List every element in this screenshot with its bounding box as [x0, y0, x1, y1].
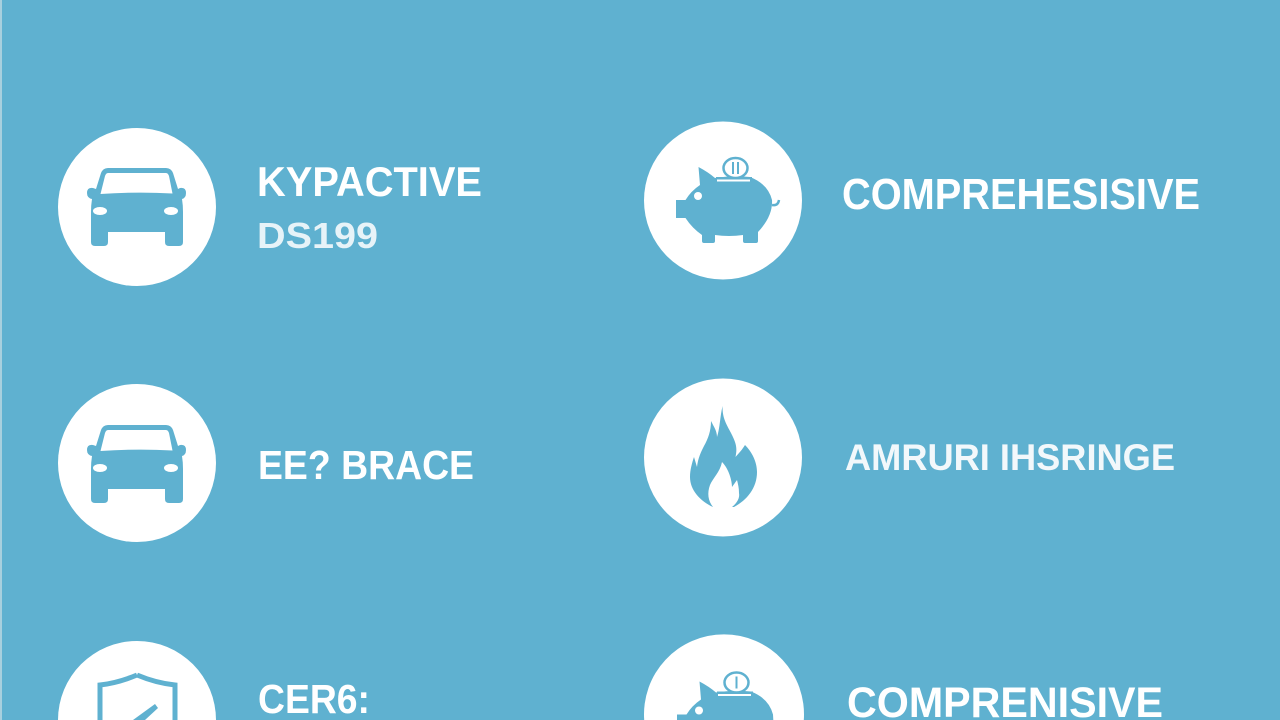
- heading: comprehesisive: COMPREHESISIVE: [842, 170, 1200, 219]
- heading: hsringe: AMRURI IHSRINGE: [845, 437, 1175, 478]
- panel: comprehesisive item: [644, 122, 1200, 280]
- icon: piggy bank in white circle: [644, 634, 804, 720]
- panel: brace item: [58, 384, 474, 542]
- icon: piggy bank in white circle: [644, 122, 802, 280]
- icon: shield in white circle: [58, 641, 216, 720]
- icon: car in white circle: [58, 384, 216, 542]
- panel: cers item: [58, 641, 370, 720]
- text: code: DS199: [257, 215, 378, 256]
- heading: brace: EE? BRACE: [258, 442, 474, 488]
- icon: flame in white circle: [644, 378, 802, 536]
- panel: comprenisive item: [644, 634, 1163, 720]
- panel: hsringe item: [644, 378, 1175, 536]
- panel: kypactive item: [58, 128, 482, 286]
- icon: car in white circle: [58, 128, 216, 286]
- heading: kypactive: KYPACTIVE: [257, 158, 482, 205]
